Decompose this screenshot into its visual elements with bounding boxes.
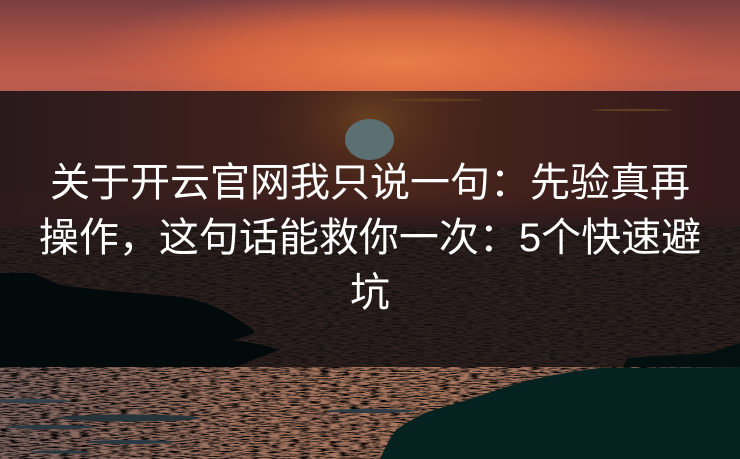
sky bbox=[0, 0, 740, 92]
lit water bbox=[0, 367, 740, 459]
title: 操作，这句话能救你一次：5个快速避 bbox=[39, 216, 701, 260]
dark water bbox=[0, 226, 740, 367]
title: 关于开云官网我只说一句：先验真再 bbox=[50, 161, 690, 205]
left headland silhouette bbox=[0, 273, 280, 367]
title bbox=[39, 161, 701, 315]
right foreground headland bbox=[380, 367, 740, 459]
sun bbox=[345, 119, 394, 160]
title: 坑 bbox=[350, 271, 390, 315]
darkened dusk sky band bbox=[0, 91, 740, 226]
right far shore silhouette bbox=[623, 343, 740, 367]
